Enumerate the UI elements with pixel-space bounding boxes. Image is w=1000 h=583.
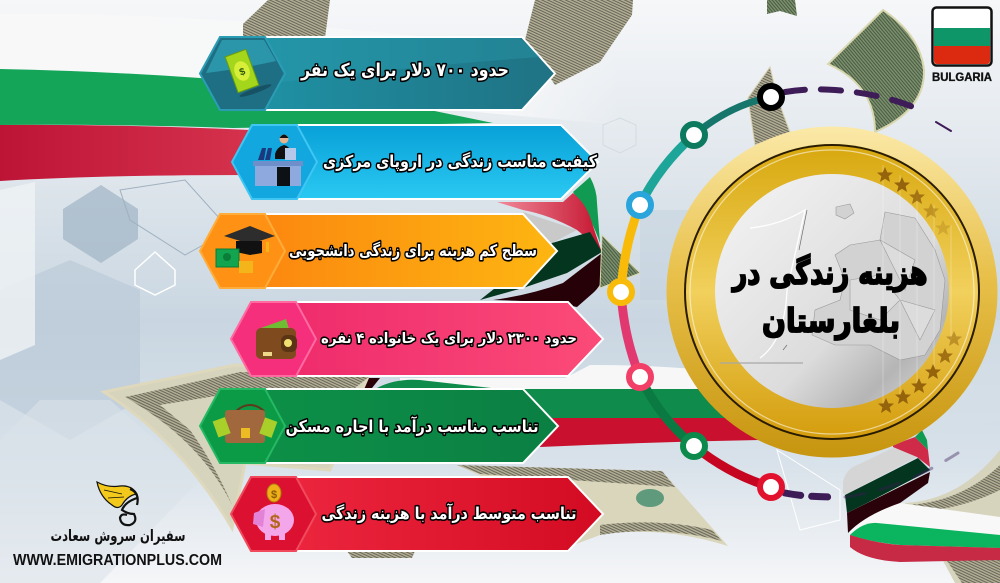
bill: top centre xyxy=(525,0,633,85)
banner 5: rent ratio: تناسب مناسب درآمد با اجاره مسکن xyxy=(286,415,538,437)
logo name: سفیران سروش سعادت xyxy=(50,527,186,545)
logo xyxy=(13,482,222,569)
banner 1: single person cost: حدود ۷۰۰ دلار برای یک نفر xyxy=(300,60,509,81)
icon: person at desk xyxy=(253,134,303,186)
icon: piggy bank and coin xyxy=(253,484,294,540)
flag label: BULGARIA xyxy=(932,72,992,84)
icon: dollar note: $ xyxy=(238,66,247,79)
dashed line bottom xyxy=(785,493,835,497)
flag ribbon: left band xyxy=(0,14,620,181)
flag ribbon: bottom right curl xyxy=(843,430,1000,562)
timeline arc xyxy=(610,86,958,498)
icon: piggy bank and coin: $ xyxy=(271,489,277,501)
coin stars xyxy=(877,167,962,413)
node 2 xyxy=(683,124,705,146)
bill: behind coin xyxy=(748,67,790,145)
coin numeral 1 outline xyxy=(720,210,805,363)
banner 1: single person cost xyxy=(200,37,555,110)
bill: bottom centre xyxy=(457,465,728,550)
title xyxy=(731,253,928,340)
bill: left large xyxy=(104,365,370,528)
coin glints xyxy=(883,165,951,410)
bill: top left xyxy=(243,0,330,38)
banner 2: quality of life xyxy=(232,125,598,199)
background hexagon pattern xyxy=(0,118,1000,583)
banner 4: family cost: حدود ۲۳۰۰ دلار برای یک خانواده ۴ نفره xyxy=(321,331,577,347)
banner 6: income to cost ratio: تناسب متوسط درآمد با هزینه زندگی xyxy=(322,502,576,524)
bill: green right xyxy=(828,10,924,132)
bill: top small xyxy=(767,0,797,16)
icon: graduation cap and cash xyxy=(216,226,275,273)
node 4 xyxy=(610,281,632,303)
banner 4: family cost xyxy=(231,302,603,376)
banner 6: income to cost ratio xyxy=(231,477,603,551)
coin silver centre xyxy=(715,174,949,408)
node 1 xyxy=(760,86,782,108)
node 6 xyxy=(683,435,705,457)
icon: briefcase with cash xyxy=(213,405,277,443)
gold coin xyxy=(666,126,998,458)
banner 3: student cost: سطح کم هزینه برای زندگی دانشجویی xyxy=(289,241,537,260)
icon: piggy bank and coin: $ xyxy=(270,512,281,533)
node 3 xyxy=(629,194,651,216)
logo wing mark xyxy=(97,482,138,525)
dashed line top xyxy=(785,89,920,110)
website url: WWW.EMIGRATIONPLUS.COM xyxy=(13,552,222,569)
flag ribbon: centre band xyxy=(375,365,770,447)
title: هزینه زندگی در xyxy=(731,253,928,293)
bill: bottom right xyxy=(905,450,1000,583)
banner 3: student cost xyxy=(200,214,557,288)
bill: bottom small xyxy=(347,551,415,558)
node 5 xyxy=(629,366,651,388)
dashed line bottom faded xyxy=(845,453,958,497)
flag badge xyxy=(932,8,992,84)
coin europe map xyxy=(812,204,945,360)
dashed line top tail xyxy=(936,122,951,131)
icon: dollar note xyxy=(225,45,272,99)
icon: wallet xyxy=(256,319,297,359)
bill: small mid xyxy=(600,235,640,288)
banner 5: rent ratio xyxy=(200,389,558,463)
title: بلغارستان xyxy=(762,301,900,340)
flag ribbon: swoop behind banners xyxy=(355,177,604,388)
banner 2: quality of life: کیفیت مناسب زندگی در اروپای مرکزی xyxy=(323,151,597,172)
node 7 xyxy=(760,476,782,498)
